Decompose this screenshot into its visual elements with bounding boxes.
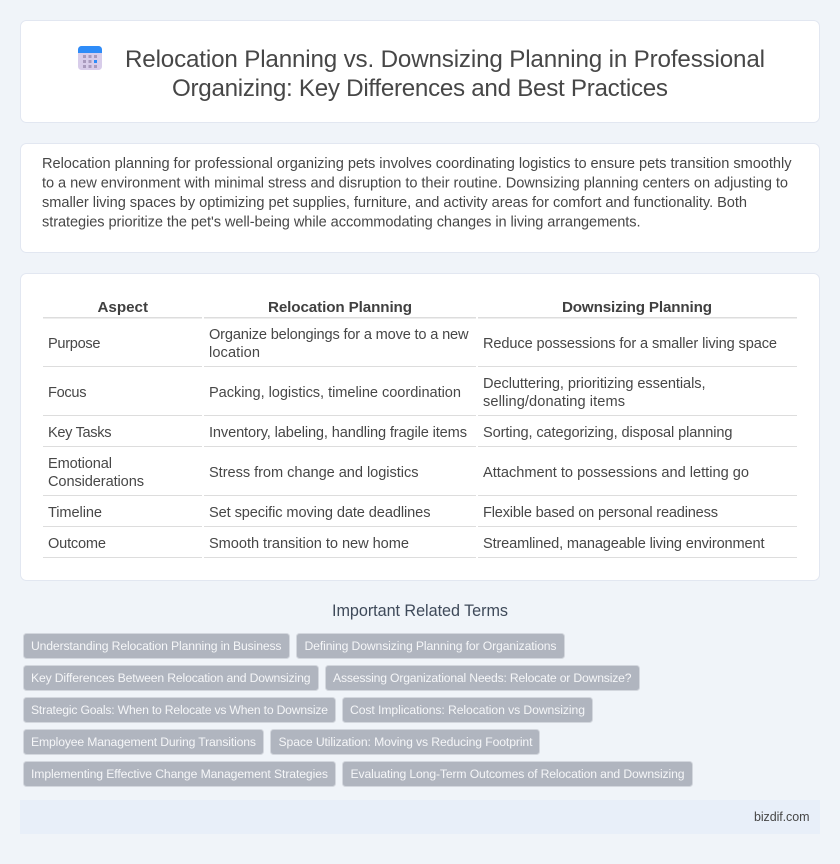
table row: key tasks: Sorting, categorizing, disposal planning [483,425,732,441]
table row: emotional considerations: Considerations [48,474,144,490]
tag: Strategic Goals: When to Relocate vs When to Downsize [31,703,328,717]
table header row: Aspect [98,299,148,316]
table row: purpose: location [209,345,260,361]
text block: introduction paragraph [42,156,792,230]
tag [24,634,290,658]
tag [342,762,692,786]
tag: Assessing Organizational Needs: Relocate or Downsize? [333,671,632,685]
title [125,46,765,102]
table header row: Downsizing Planning [562,299,712,316]
tag [24,666,318,690]
tag: Implementing Effective Change Management Strategies [31,767,328,781]
heading: important related terms: Important Related Terms [332,602,508,620]
tag [326,666,640,690]
table row: outcome [48,536,764,552]
tag [24,762,336,786]
table row: key tasks: Key Tasks [48,425,112,441]
table row: emotional considerations: Attachment to possessions and letting go [483,465,749,481]
text block: introduction paragraph: strategies prioritize the pet's well-being while accommodating changes in living arrangements. [42,214,640,230]
tag [24,698,336,722]
tag: Defining Downsizing Planning for Organizations [304,639,556,653]
table row: purpose: Purpose [48,336,100,352]
table row: focus: Packing, logistics, timeline coordination [209,385,461,401]
tag: Employee Management During Transitions [31,735,256,749]
table row: outcome: Outcome [48,536,106,552]
tag [270,730,540,754]
table row: timeline: Set specific moving date deadlines [209,505,430,521]
title: Organizing: Key Differences and Best Practices [172,75,668,102]
table row: focus: Focus [48,385,86,401]
table row: focus: selling/donating items [483,394,625,410]
table row: purpose: Reduce possessions for a smaller living space [483,336,777,352]
footer: bizdif.com [754,810,810,824]
tag: Cost Implications: Relocation vs Downsizing [350,703,585,717]
table row: outcome: Streamlined, manageable living environment [483,536,764,552]
table row: focus [48,376,706,410]
text block: introduction paragraph: to a new environment with minimal stress and disruption to their routine. Downsizing planning centers on adjusting to [42,176,788,192]
panel: related term tags [24,634,692,786]
tag: Evaluating Long-Term Outcomes of Relocation and Downsizing [350,767,684,781]
panel: header [20,20,820,122]
table row: emotional considerations [48,456,749,490]
table row: outcome: Smooth transition to new home [209,536,409,552]
tag [24,730,264,754]
table row: emotional considerations: Stress from change and logistics [209,465,418,481]
title: Relocation Planning vs. Downsizing Planning in Professional [125,46,765,73]
table header row [98,299,712,316]
icon: calendar [78,46,102,70]
footer [20,800,820,834]
tag: Understanding Relocation Planning in Business [31,639,282,653]
table row: timeline: Flexible based on personal readiness [483,505,718,521]
table row: emotional considerations: Emotional [48,456,112,472]
tag: Key Differences Between Relocation and Downsizing [31,671,310,685]
table row: key tasks [48,425,732,441]
table header row: Relocation Planning [268,299,412,316]
text block: introduction paragraph: Relocation planning for professional organizing pets involves coordinating logistics to ensure pets transition smoothly [42,156,792,172]
table row: purpose [48,327,777,361]
tag: Space Utilization: Moving vs Reducing Footprint [278,735,533,749]
tag [296,634,564,658]
table row: focus: Decluttering, prioritizing essentials, [483,376,706,392]
panel: comparison table [20,274,820,580]
table row: key tasks: Inventory, labeling, handling fragile items [209,425,467,441]
table row: timeline: Timeline [48,505,102,521]
panel: introduction [20,144,820,252]
table row: timeline [48,505,718,521]
text block: introduction paragraph: smaller living spaces by optimizing pet supplies, furniture, and activity areas for comfort and functionality. Both [42,195,747,211]
tag [342,698,592,722]
table row: purpose: Organize belongings for a move to a new [209,327,469,343]
